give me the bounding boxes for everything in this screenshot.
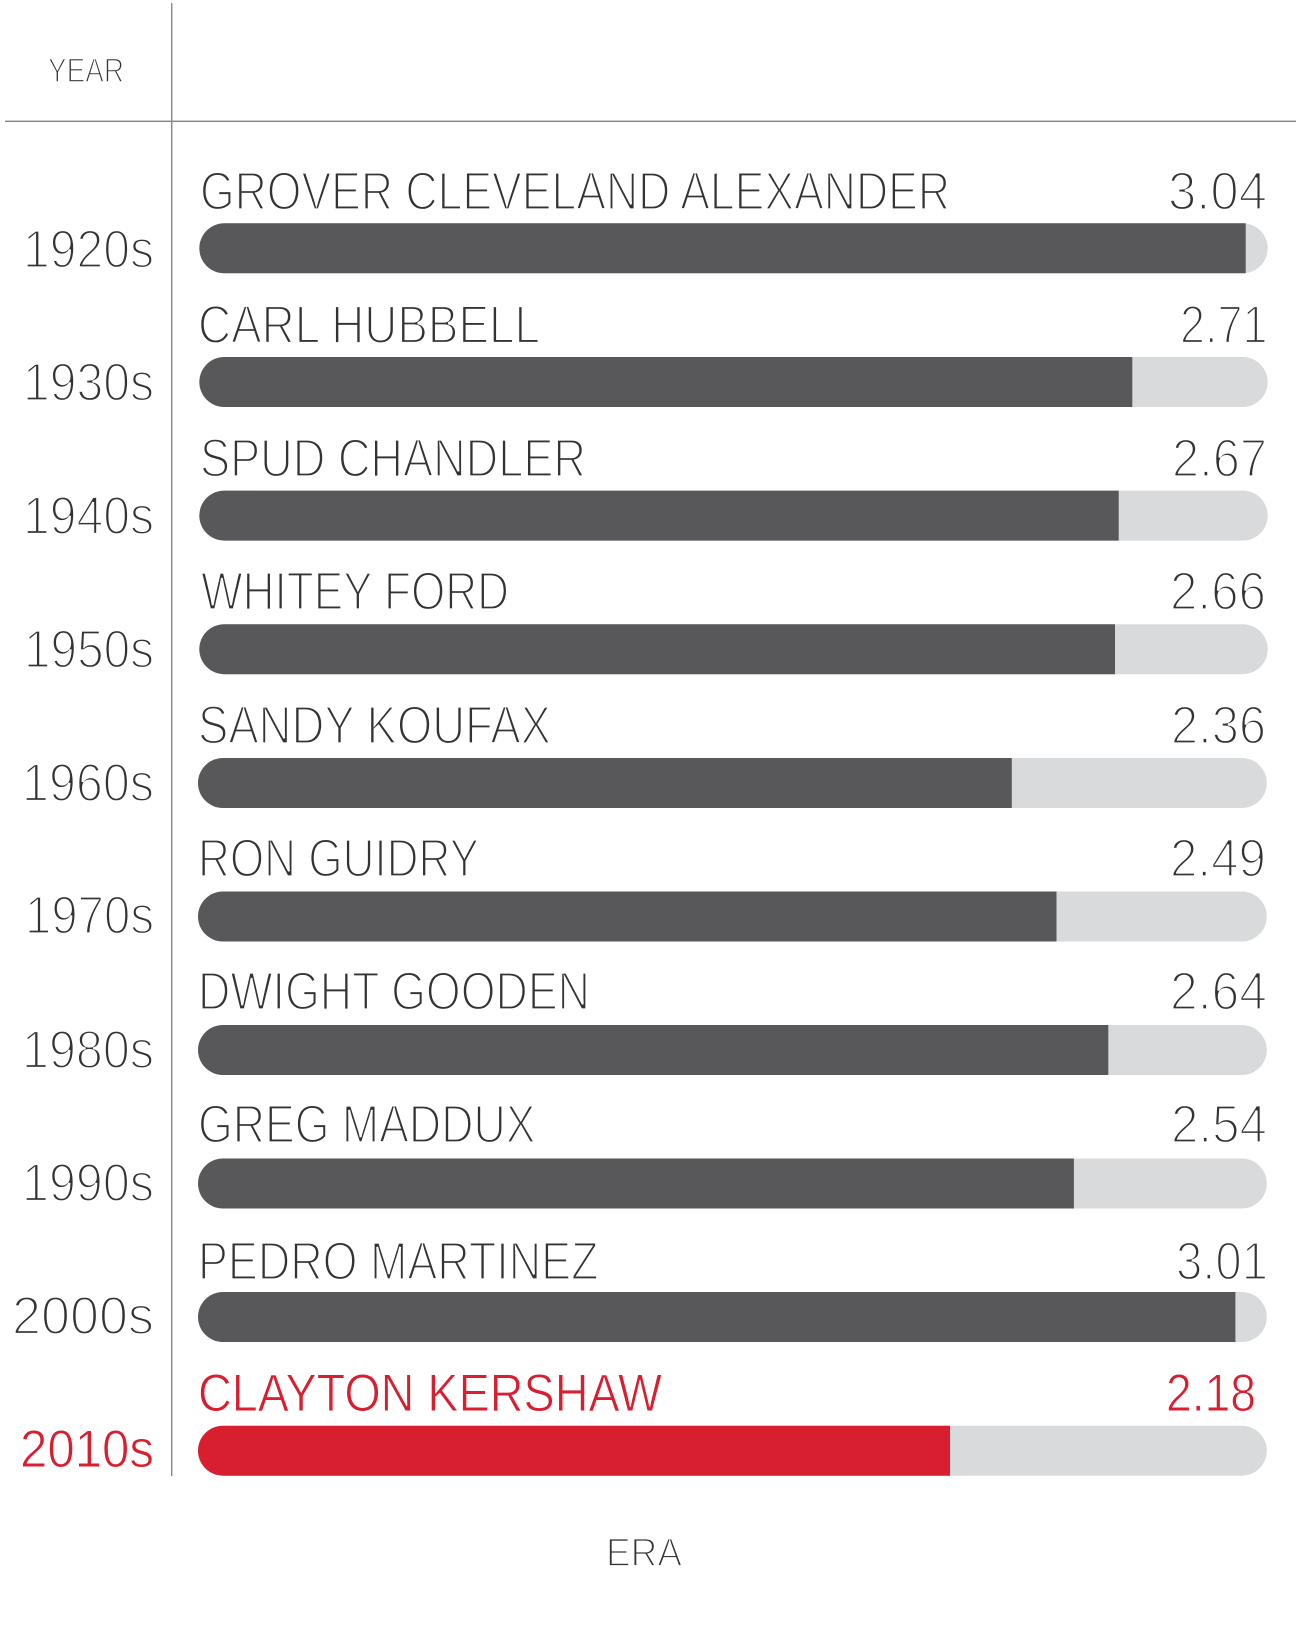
vertical year axis xyxy=(171,3,172,1476)
year label: 1990s xyxy=(22,1153,154,1213)
row: 1980s Dwight Gooden xyxy=(22,962,1267,1080)
bar value xyxy=(199,357,1132,407)
year label: 2000s xyxy=(12,1286,154,1346)
pitcher name: CARL HUBBELL xyxy=(198,295,540,355)
pitcher name: DWIGHT GOODEN xyxy=(198,962,590,1022)
bar track xyxy=(199,491,1268,541)
year label: 1980s xyxy=(22,1020,154,1080)
bar track xyxy=(199,357,1268,407)
year label: 1950s xyxy=(24,620,154,680)
bar track xyxy=(199,223,1268,273)
pitcher name: SPUD CHANDLER xyxy=(200,429,586,489)
pitcher name: RON GUIDRY xyxy=(198,829,479,889)
row: 1960s Sandy Koufax xyxy=(22,696,1267,813)
ERA value: 2.18 xyxy=(1166,1364,1256,1423)
bar value xyxy=(198,1426,950,1476)
ERA value: 2.49 xyxy=(1170,829,1266,889)
pitcher name: PEDRO MARTINEZ xyxy=(198,1232,598,1292)
bar track xyxy=(198,1426,1267,1476)
year label: 1960s xyxy=(22,753,154,813)
year column heading: YEAR xyxy=(48,52,124,90)
bar value xyxy=(199,491,1119,541)
ERA value: 2.66 xyxy=(1170,562,1266,622)
row: 1930s Carl Hubbell xyxy=(23,295,1268,412)
row: 1990s Greg Maddux xyxy=(22,1095,1267,1213)
row: 1970s Ron Guidry xyxy=(25,829,1267,946)
pitcher name: SANDY KOUFAX xyxy=(198,696,551,756)
pitcher name: CLAYTON KERSHAW xyxy=(198,1364,662,1423)
bar track xyxy=(198,1158,1267,1208)
bar value xyxy=(199,223,1246,273)
row: 1940s Spud Chandler xyxy=(23,429,1268,546)
bar track xyxy=(198,1025,1267,1075)
year label: 1930s xyxy=(23,352,154,412)
year label: 1920s xyxy=(23,220,154,280)
x-axis label: ERA xyxy=(606,1531,682,1575)
pitcher name: WHITEY FORD xyxy=(201,562,509,622)
row: 2000s Pedro Martinez xyxy=(12,1232,1268,1346)
ERA value: 3.04 xyxy=(1168,162,1267,222)
ERA value: 3.01 xyxy=(1176,1232,1268,1292)
year label: 1970s xyxy=(25,886,154,946)
bar value xyxy=(198,1025,1108,1075)
ERA value: 2.67 xyxy=(1172,429,1267,489)
bar value xyxy=(198,758,1012,808)
bar value xyxy=(199,624,1115,674)
year label: 1940s xyxy=(23,486,154,546)
ERA value: 2.64 xyxy=(1170,962,1267,1022)
pitcher name: GROVER CLEVELAND ALEXANDER xyxy=(200,162,950,222)
row: 1950s Whitey Ford xyxy=(24,562,1268,680)
bar track xyxy=(198,892,1267,942)
bar track xyxy=(199,624,1268,674)
ERA value: 2.71 xyxy=(1180,295,1268,355)
pitcher name: GREG MADDUX xyxy=(198,1095,536,1155)
bar track xyxy=(198,1292,1267,1342)
bar value xyxy=(198,892,1056,942)
bar value xyxy=(198,1158,1074,1208)
header rule xyxy=(5,121,1296,122)
ERA value: 2.36 xyxy=(1171,696,1266,756)
ERA value: 2.54 xyxy=(1171,1095,1267,1155)
row: 2010s Clayton Kershaw highlighted xyxy=(20,1364,1267,1479)
bar track xyxy=(198,758,1267,808)
year label: 2010s xyxy=(20,1420,154,1479)
row: 1920s Grover Cleveland Alexander xyxy=(23,162,1268,280)
bar value xyxy=(198,1292,1235,1342)
